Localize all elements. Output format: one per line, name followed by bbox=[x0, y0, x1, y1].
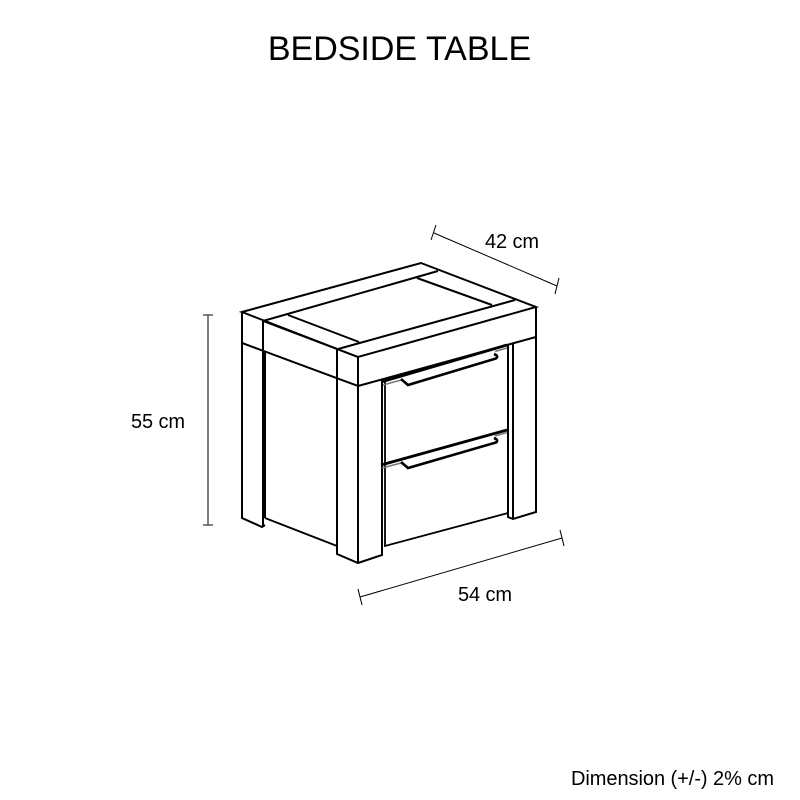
lower drawer rail and handle bbox=[381, 430, 507, 468]
right front leg bbox=[508, 337, 536, 519]
width dimension line bbox=[358, 530, 564, 605]
height dimension line bbox=[203, 315, 213, 525]
drawer frame bbox=[385, 382, 508, 546]
depth label: 42 cm bbox=[485, 231, 539, 253]
table top front and side edges bbox=[242, 307, 536, 386]
side panel bottom edge bbox=[265, 518, 337, 546]
title: BEDSIDE TABLE bbox=[268, 30, 531, 68]
width label: 54 cm bbox=[458, 584, 512, 606]
upper drawer rail and handle bbox=[381, 345, 507, 385]
depth dimension line bbox=[431, 225, 559, 294]
table top surface bbox=[242, 263, 536, 357]
front corner leg bbox=[337, 380, 382, 563]
bedside table drawing bbox=[242, 263, 536, 563]
height label: 55 cm bbox=[131, 411, 185, 433]
left rear leg bbox=[242, 343, 265, 527]
dimension tolerance note: Dimension (+/-) 2% cm bbox=[571, 768, 774, 790]
